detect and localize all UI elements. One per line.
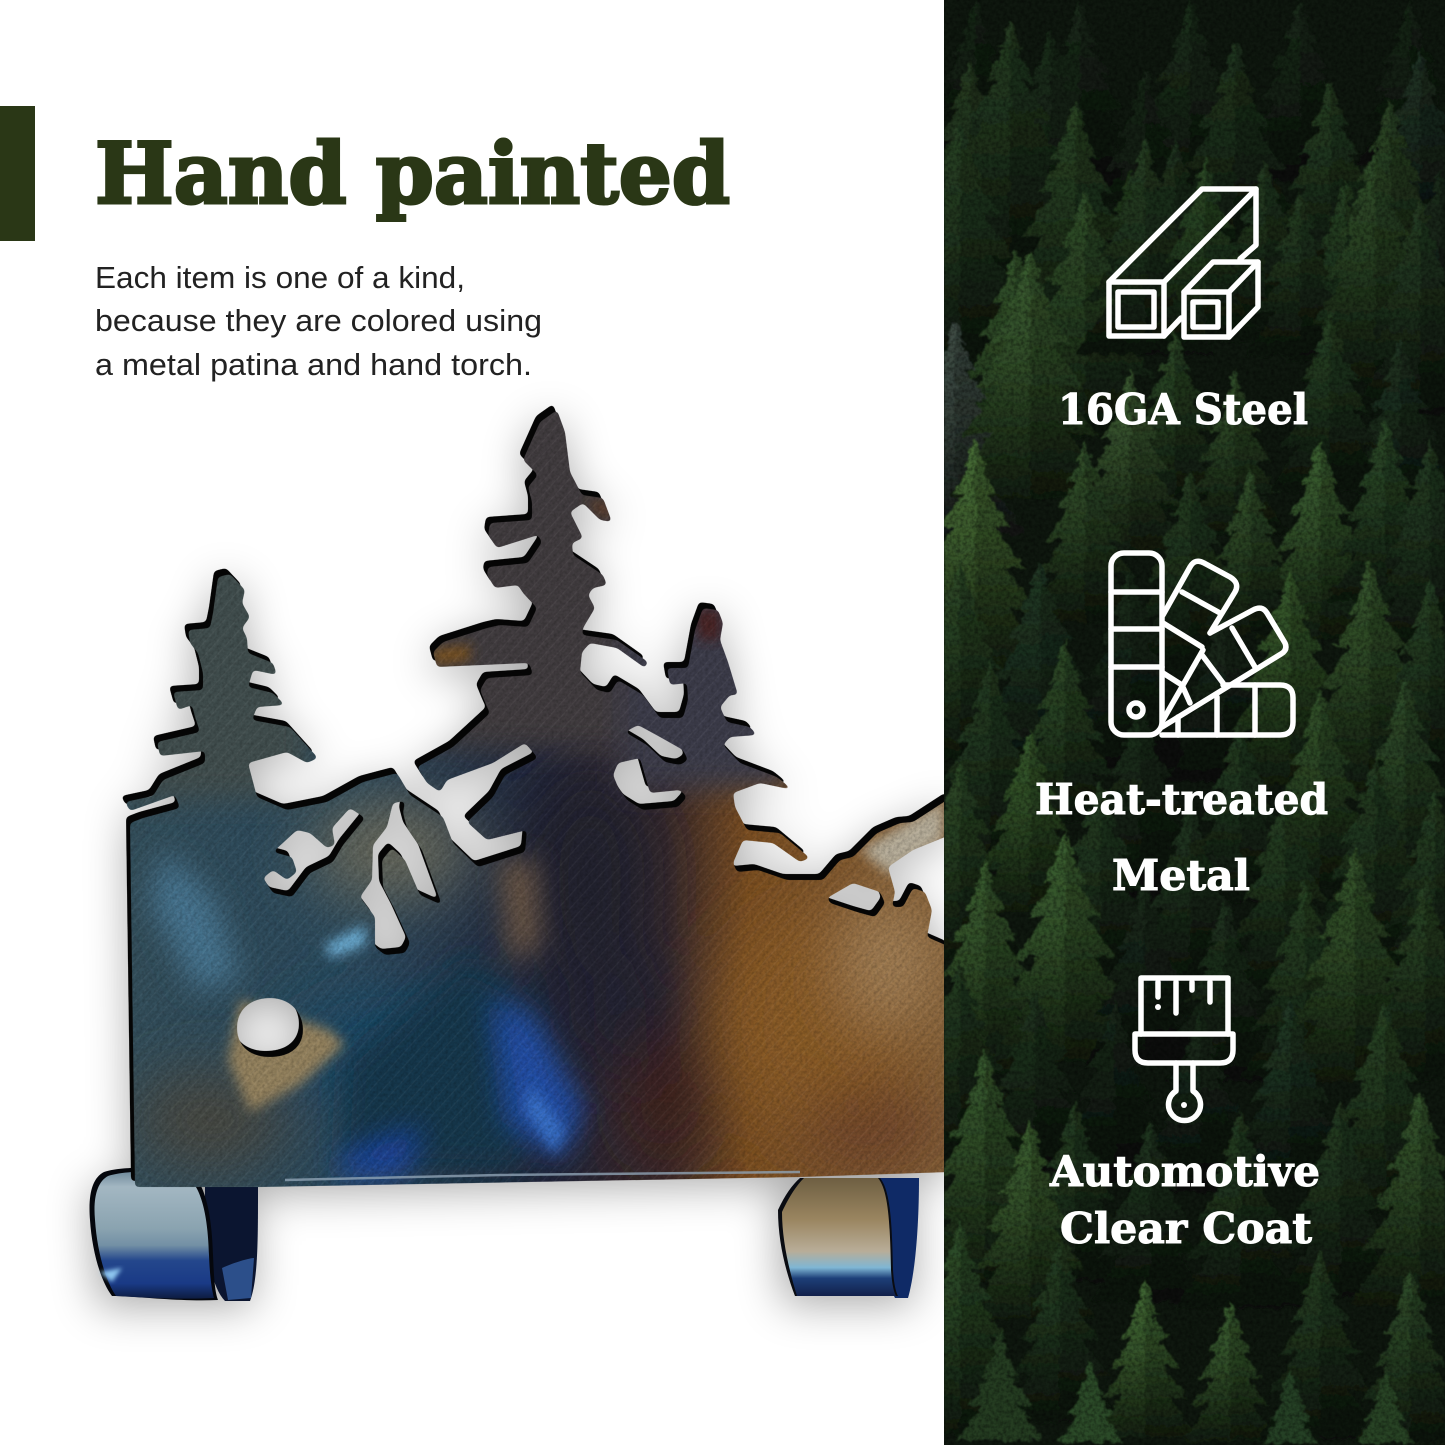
forest needle texture	[944, 0, 1445, 1445]
hook: right	[778, 1178, 919, 1298]
label: Heat-treated Metal: Heat-treated	[1035, 775, 1328, 824]
title: Hand painted	[95, 124, 730, 223]
label: Heat-treated Metal: Metal	[1112, 851, 1250, 900]
forest background panel	[944, 0, 1445, 1445]
description text: a metal patina and hand torch.	[95, 347, 532, 382]
icon: steel tubes	[1109, 189, 1258, 337]
patina colour blobs	[130, 770, 940, 1170]
product photo: metal tree hook rack	[90, 390, 950, 1306]
description text: Each item is one of a kind,	[95, 260, 465, 295]
hook: left	[90, 1168, 258, 1301]
accent bar	[0, 106, 35, 241]
icon: colour swatch fan	[1111, 553, 1293, 735]
forest trees	[879, 0, 1445, 1444]
description text: because they are colored using	[95, 303, 542, 338]
label: 16GA Steel: 16GA Steel	[1058, 385, 1308, 434]
label: Automotive Clear Coat	[1049, 1147, 1320, 1253]
label: Heat-treated Metal	[1035, 775, 1328, 900]
forest darkening overlay	[944, 0, 1445, 1445]
feature: 16GA Steel	[1058, 189, 1308, 434]
feature: Heat-treated Metal	[1035, 553, 1328, 900]
brushed streaks	[273, 614, 894, 1186]
icon dots	[1155, 1004, 1187, 1108]
label: Automotive Clear Coat: Clear Coat	[1060, 1204, 1313, 1253]
metal edge: black offset layer	[121, 404, 946, 1181]
icon: paint brush	[1135, 978, 1233, 1121]
label: Automotive Clear Coat: Automotive	[1049, 1147, 1320, 1196]
bottom edge highlight	[285, 1172, 800, 1180]
description text	[95, 260, 542, 382]
metal plate with heat patina	[110, 390, 950, 1210]
feature: Automotive Clear Coat	[1049, 978, 1320, 1253]
drop shadow	[90, 416, 948, 1306]
